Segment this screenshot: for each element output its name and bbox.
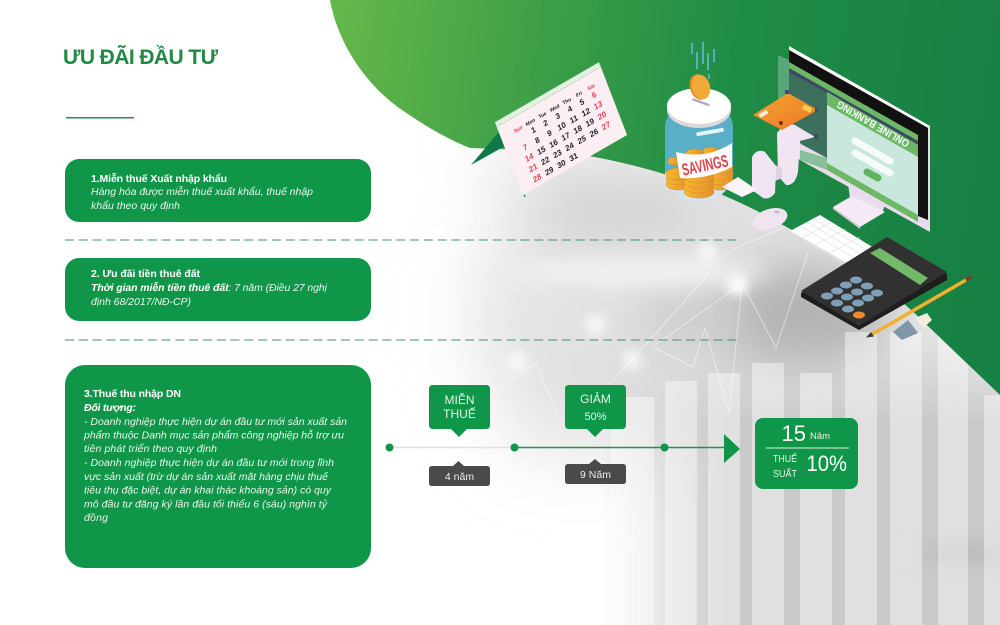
icon: desk calendar: 11: [569, 113, 580, 126]
panel: 1 export import tax exemption: 1.Miễn thuế Xuất nhập khẩu: [91, 172, 227, 185]
icon: pencil: [866, 277, 971, 338]
icon: eraser: [893, 313, 932, 340]
icon: desk calendar: 21: [528, 161, 539, 174]
panel: 2 land rent incentive: [65, 258, 371, 321]
panel: 3 corporate income tax: Đối tượng:: [84, 402, 136, 414]
result box: 15 years, 10 percent tax: Năm: [810, 431, 830, 442]
icon: desk calendar: 31: [568, 151, 580, 164]
result box: 15 years, 10 percent tax: [755, 418, 858, 489]
panel: 3 corporate income tax: - Doanh nghiệp thực hiện dự án đầu tư mới sản xuất sản: [84, 416, 347, 428]
panel: 3 corporate income tax: đồng: [84, 512, 108, 524]
icon: desk calendar: 27: [601, 119, 612, 132]
title: ƯU ĐÃI ĐẦU TƯ: [63, 46, 219, 69]
panel: 3 corporate income tax: phẩm thuộc Danh mục sản phẩm công nghiệp hỗ trợ ưu: [83, 428, 344, 442]
icon: desk calendar: 9: [546, 128, 554, 139]
icon: credit card and paper receipt: [722, 90, 818, 198]
callout: 50 percent reduction: [565, 385, 626, 437]
panel: 2 land rent incentive: định 68/2017/NĐ-CP): [91, 296, 191, 308]
icon: savings jar with coins: [665, 42, 733, 202]
panel: 2 land rent incentive: Thời gian miễn tiền thuê đất: 7 năm (Điều 27 nghị: [91, 281, 328, 294]
icon: desk calendar: 19: [584, 116, 596, 129]
timeline arrow: [386, 434, 740, 463]
panel: 3 corporate income tax: [65, 365, 371, 568]
icon: desk calendar: 16: [548, 137, 560, 150]
icon: desk calendar: Mon: [525, 117, 536, 128]
icon: desk calendar: 15: [536, 144, 547, 157]
icon: desk calendar: Sat: [587, 83, 596, 92]
icon: keyboard: [790, 215, 874, 266]
icon: desk calendar: [471, 62, 627, 197]
icon: online banking monitor: [778, 46, 930, 232]
icon: desk calendar: 20: [597, 109, 608, 122]
result box: 15 years, 10 percent tax: THUẾ: [773, 452, 797, 465]
panel: 3 corporate income tax: 3.Thuế thu nhập DN: [84, 388, 181, 400]
callout: 50 percent reduction: 50%: [584, 411, 607, 423]
panel: 3 corporate income tax: vực sản xuất (trừ dự án sản xuất mặt hàng chịu thuế: [84, 471, 329, 483]
callout: 50 percent reduction: GIẢM: [580, 391, 611, 406]
result box: 15 years, 10 percent tax: 10%: [806, 451, 847, 476]
label: 9 years: 9 Năm: [580, 469, 611, 481]
panel: 3 corporate income tax: tiêu thụ đặc biệt, dự án khai thác khoáng sản) có quy: [84, 484, 332, 496]
callout: tax exempt: THUẾ: [443, 406, 476, 421]
icon: desk calendar: Wed: [549, 103, 561, 114]
icon: desk calendar: 30: [556, 158, 567, 171]
icon: desk calendar: 13: [593, 99, 604, 112]
icon: desk calendar: 4: [566, 104, 574, 114]
icon: desk calendar: 14: [524, 151, 535, 164]
icon: desk calendar: 23: [552, 147, 563, 160]
icon: desk calendar: 24: [564, 140, 576, 153]
icon: desk calendar: 22: [540, 154, 551, 167]
panel: 1 export import tax exemption: Hàng hóa được miễn thuế xuất khẩu, thuế nhập: [91, 185, 313, 198]
icon: desk calendar: 17: [560, 130, 572, 143]
icon: desk calendar: 26: [588, 126, 600, 139]
background: grey chart haze: [456, 150, 1000, 625]
label: 9 years: [565, 459, 626, 484]
icon: online banking monitor: ONLINE BANKING: [835, 98, 912, 149]
icon: desk calendar: 29: [544, 165, 555, 178]
panel: 3 corporate income tax: mô đầu tư đăng ký lần đầu tối thiểu 6 (sáu) nghìn tỷ: [84, 498, 328, 510]
icon: desk calendar: Fri: [575, 90, 584, 99]
callout: tax exempt: [429, 385, 490, 437]
green curved header shape: [330, 0, 1000, 395]
icon: calculator: [801, 237, 947, 330]
icon: desk calendar: 6: [591, 90, 598, 100]
panel: 3 corporate income tax: tiên phát triển theo quy định: [84, 443, 217, 455]
result box: 15 years, 10 percent tax: 15: [782, 421, 806, 446]
icon: desk calendar: 7: [522, 142, 529, 153]
panel: 3 corporate income tax: - Doanh nghiệp thực hiện dự án đầu tư mới trong lĩnh: [84, 457, 334, 469]
icon: desk calendar: Sun: [513, 125, 524, 135]
icon: computer mouse: [750, 204, 790, 234]
icon: desk calendar: 28: [532, 172, 543, 185]
icon: desk calendar: 5: [579, 97, 586, 107]
icon: desk calendar: Tue: [538, 111, 548, 121]
panel: 1 export import tax exemption: khẩu theo quy định: [91, 200, 180, 212]
icon: desk calendar: 2: [542, 118, 550, 128]
title underline: [66, 117, 134, 118]
background: translucent bars: [611, 332, 1000, 625]
icon: desk calendar: 12: [581, 106, 592, 119]
label: 4 years: [429, 461, 490, 486]
icon: desk calendar: 3: [554, 111, 562, 121]
callout: tax exempt: MIỄN: [444, 392, 474, 407]
panel: 1 export import tax exemption: [65, 159, 371, 222]
background: thin line chart with glowing nodes: [490, 225, 808, 417]
icon: desk calendar: 10: [556, 120, 568, 133]
icon: savings jar with coins: SAVINGS: [680, 151, 730, 180]
panel: 2 land rent incentive: 2. Ưu đãi tiền thuê đất: [91, 268, 200, 280]
icon: desk calendar: 8: [534, 135, 541, 146]
result box: 15 years, 10 percent tax: SUẤT: [773, 467, 797, 480]
icon: desk calendar: 1: [530, 125, 538, 135]
label: 4 years: 4 năm: [445, 471, 474, 483]
icon: desk calendar: Thu: [562, 97, 572, 107]
icon: desk calendar: 25: [576, 133, 588, 146]
icon: desk calendar: 18: [572, 123, 584, 136]
dashed divider lines: [65, 240, 737, 340]
